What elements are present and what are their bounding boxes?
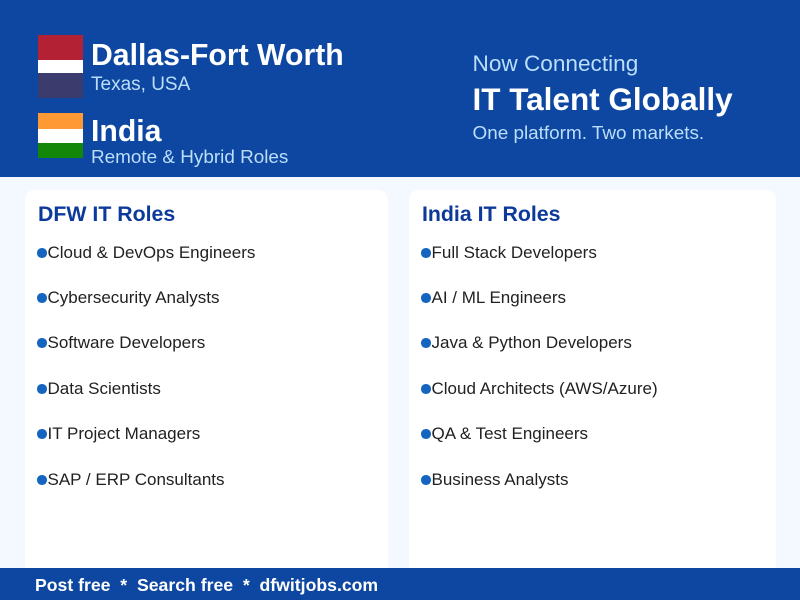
role list: DFW <box>37 243 255 489</box>
location subheading: Texas, USA: Texas, USA <box>91 74 190 95</box>
panel: DFW IT roles <box>25 190 388 568</box>
role list: DFW: IT Project Managers <box>48 424 200 443</box>
role list: DFW: SAP / ERP Consultants <box>48 470 225 489</box>
role list: DFW: Software Developers <box>48 333 205 352</box>
role list: India <box>421 243 658 489</box>
role list: DFW: Cloud & DevOps Engineers <box>48 243 255 262</box>
footer bar <box>0 568 800 600</box>
role list: India: QA & Test Engineers <box>432 424 588 443</box>
role list: DFW: Cybersecurity Analysts <box>48 288 219 307</box>
panel heading: DFW IT Roles: DFW IT Roles <box>38 202 175 226</box>
location subheading: Remote & Hybrid Roles: Remote & Hybrid Roles <box>91 147 288 168</box>
role list: India: Cloud Architects (AWS/Azure) <box>432 379 658 398</box>
panel heading: India IT Roles: India IT Roles <box>422 202 560 226</box>
header banner <box>0 0 800 177</box>
panel: India IT roles <box>409 190 776 568</box>
role list: India: Java & Python Developers <box>432 333 632 352</box>
role list: India: AI / ML Engineers <box>432 288 566 307</box>
footer text: Post free * Search free * dfwitjobs.com <box>35 574 378 594</box>
role list: DFW: Data Scientists <box>48 379 161 398</box>
icon: India flag <box>38 113 83 158</box>
tagline: One platform. Two markets.: One platform. Two markets. <box>472 123 704 144</box>
location heading: Dallas-Fort Worth: Dallas-Fort Worth <box>91 39 344 72</box>
role list: India: Full Stack Developers <box>432 243 597 262</box>
role list: India: Business Analysts <box>432 470 569 489</box>
headline: IT Talent Globally: IT Talent Globally <box>472 80 733 116</box>
tagline: Now Connecting: Now Connecting <box>472 51 638 76</box>
location heading: India: India <box>91 115 161 148</box>
icon: USA flag <box>38 35 83 98</box>
